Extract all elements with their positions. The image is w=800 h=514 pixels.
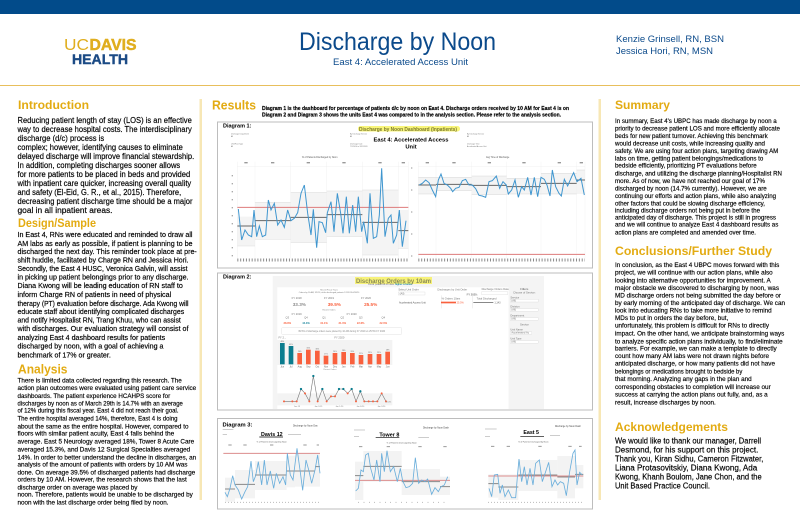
dashboard content: Q3 bbox=[359, 315, 363, 319]
dashboard filter labels: Discharge Time bbox=[467, 144, 479, 146]
bar chart: discharge orders by month: 30% bbox=[315, 349, 320, 351]
unit panel: (All) bbox=[400, 291, 405, 295]
left column divider bbox=[200, 99, 202, 500]
kpi: quarterly percentages: 31.1% bbox=[320, 321, 328, 325]
filters sidebar: (All) bbox=[511, 308, 516, 312]
text: conclusions: In conclusion, as the East 4 UBPC moves forward with this bbox=[615, 262, 780, 269]
text: acknowledgements: Desmond, for his support on this project. bbox=[615, 445, 758, 454]
text: analysis: orders by 10 AM. However, the research shows that the last bbox=[18, 477, 187, 484]
text: introduction: goal in all inpatient areas. bbox=[18, 206, 112, 215]
text: analysis: discharges by noon as of March 29th is 14.7% with an average bbox=[18, 400, 183, 407]
filters sidebar: Division bbox=[510, 305, 520, 309]
subtitle: Fiscal year 2019-20 data: higher is better bbox=[368, 283, 412, 286]
text: summary: action plans are completed and amended over time. bbox=[615, 229, 756, 236]
dashboard filter labels: 7/1/2014 to 3/31/2020 bbox=[350, 145, 368, 148]
dashboard filter labels: All bbox=[350, 135, 353, 138]
text: acknowledgements: Liana Protasovitskiy, Diana Kwong, Ada bbox=[615, 464, 758, 473]
chart: average time of discharge: Avg Time of Discharge bbox=[486, 156, 510, 159]
logo: UC Davis Health: DAVIS bbox=[90, 37, 137, 54]
text: design/sample: with discharges. Our evaluation strategy will consist of bbox=[16, 326, 189, 333]
dashboard content: Q1 bbox=[322, 315, 326, 319]
dashboard content: Orders by 10 AM, 3/1/20, while discharged patients 1/1/2019-6/30/20 bbox=[299, 291, 360, 294]
text: conclusions: that morning. Analyzing any gaps in the plan and bbox=[615, 376, 752, 383]
bar chart: discharge orders by month: Apr bbox=[368, 366, 372, 369]
kpi: quarterly percentages: 22.0% bbox=[380, 321, 388, 325]
text: summary: discharge, and utilizing the discharge planning/Hospitalist RN bbox=[615, 170, 782, 177]
dashboard filter labels: All bbox=[231, 135, 234, 138]
kpi: quarterly percentages bbox=[284, 321, 388, 325]
chart: Davis 12: Discharge by Noon Das bbox=[293, 424, 318, 427]
text: analysis: of 12% during this fiscal year. East 4 did not reach their goal. bbox=[18, 408, 179, 415]
text: introduction: decreasing patient discharge time should be a major bbox=[18, 197, 193, 206]
bar chart: discharge orders by month: 45% bbox=[289, 344, 293, 346]
label: diagram 1: Diagram 1: bbox=[223, 124, 252, 130]
label: diagram 3: Diagram 3: bbox=[222, 422, 253, 428]
text: summary: anticipated day of discharge. This project is still in progress bbox=[615, 215, 777, 222]
dashboard content: FY 2019 bbox=[292, 312, 302, 316]
line chart: recent orders: Jun 1-20 bbox=[335, 406, 344, 408]
callout bbox=[282, 328, 402, 334]
text: design/sample: in picking up patient belongings prior to any discharge. bbox=[18, 274, 189, 282]
unit panel: Discharges by Unit Order bbox=[437, 288, 467, 292]
panel: diagram 1 bbox=[218, 122, 592, 268]
dashboard content bbox=[277, 283, 538, 369]
text: analysis: 14%. In order to better understand the decline in discharges, an bbox=[18, 454, 197, 461]
filters sidebar: Service bbox=[520, 322, 529, 326]
text: design/sample: discharged by noon, with a goal of achieving a bbox=[18, 344, 164, 350]
text: introduction: with inpatient care quicker, increasing overall quality bbox=[17, 179, 191, 188]
text: design/sample bbox=[16, 232, 197, 360]
text: analysis: discharge order on average was placed by bbox=[18, 484, 138, 491]
text: introduction: way to decrease hospital costs. The interdisciplinary bbox=[17, 125, 192, 134]
filters sidebar: Department bbox=[510, 314, 524, 318]
text: analysis: The entire hospital averaged 14%, therefore, East 4 is doing bbox=[18, 415, 178, 422]
chart: Davis 12 bbox=[223, 424, 320, 502]
unit panel: Discharge Orders Date bbox=[482, 287, 509, 291]
authors: Jessica Hori, RN, MSN bbox=[616, 46, 713, 57]
unit panel: Accelerated Access Unit bbox=[399, 301, 426, 304]
dashboard content: Q3 bbox=[286, 315, 290, 319]
dashboard filter labels: Discharge Department bbox=[231, 132, 249, 136]
authors: Kenzie Grinsell, RN, BSN bbox=[616, 34, 724, 45]
unit panel: 25.5% bbox=[457, 302, 464, 305]
dashboard unit heading: East 4: Accelerated Access bbox=[374, 138, 448, 144]
text: introduction bbox=[17, 116, 194, 215]
title: Discharge by Noon bbox=[299, 28, 496, 56]
bar chart: discharge orders by month: Jun bbox=[386, 367, 390, 369]
chart: East 5: East 5 bbox=[523, 430, 539, 436]
unit panel bbox=[398, 287, 509, 308]
text: analysis: averaged 15.3%, and Davis 12 Surgical Specialties averaged bbox=[18, 446, 191, 453]
text: design/sample: AM labs as early as possible, if patient is planning to be bbox=[18, 241, 193, 248]
text: summary bbox=[614, 118, 782, 236]
bar chart: discharge orders by month: May bbox=[377, 367, 382, 369]
dashboard unit heading: Unit bbox=[405, 144, 417, 150]
kpi: yearly percentages: 39.5% bbox=[328, 302, 342, 307]
heading: acknowledgements: Acknowledgements bbox=[615, 420, 728, 434]
dashboard filter labels: Unit/Floor Type bbox=[231, 142, 243, 146]
bar chart: discharge orders by month: Jul bbox=[290, 367, 293, 369]
text: results intro: Diagram 1 is the dashboard for percentage of patients d/c by noon on East 4. Discharge orders received by 10 AM for East 4 is on bbox=[262, 106, 570, 112]
dashboard content: Q4 bbox=[382, 315, 386, 319]
filters sidebar: (All) bbox=[511, 298, 516, 302]
dashboard filter labels bbox=[231, 132, 487, 148]
bar chart: discharge orders by month: 21% bbox=[359, 353, 363, 355]
dashboard content: Recent Orders bbox=[323, 309, 335, 312]
text: design/sample: therapy (PT) evaluation before discharge. Ada Kwong will bbox=[18, 301, 189, 308]
text: introduction: In addition, completing discharges sooner allows bbox=[18, 161, 180, 170]
dashboard filter labels: By Discharge Service bbox=[467, 134, 484, 136]
text: summary: beds for new patient turnover. Achieving this benchmark bbox=[615, 133, 768, 140]
text: design/sample: benchmark of 17% or greater. bbox=[18, 352, 111, 360]
heading: analysis: Analysis bbox=[18, 362, 68, 376]
kpi: yearly percentages bbox=[292, 296, 378, 307]
bar chart: discharge orders by month: 31% bbox=[306, 348, 311, 350]
text: conclusions: result, increase discharges by noon. bbox=[615, 399, 716, 406]
text: summary: would decrease unit costs, while increasing quality and bbox=[614, 140, 765, 147]
bar chart: discharge orders by month: 26% bbox=[350, 351, 355, 353]
dashboard content: Recent Fiscal Years bbox=[320, 289, 338, 292]
chart: percent of patients discharged by noon bbox=[232, 156, 408, 260]
text: analysis: dashboards. The patient experience HCAHPS score for bbox=[18, 393, 171, 400]
text: summary: continuing our efforts and action plans, while also analyzing bbox=[615, 193, 776, 200]
dashboard content: Q2 bbox=[341, 315, 345, 319]
kpi: quarterly percentages: 22.6% bbox=[357, 321, 365, 325]
header gold rule bbox=[0, 85, 800, 86]
text: design/sample: Secondly, the East 4 HUSC, Veronica Galvin, will assist bbox=[18, 266, 188, 273]
text: introduction: discharge (d/c) process is bbox=[18, 134, 104, 143]
dashboard filter labels: Accelerated Access Unit bbox=[467, 145, 487, 148]
filters sidebar: Accelerated Ac bbox=[511, 331, 530, 335]
filters sidebar: Choose of Service: bbox=[513, 291, 536, 295]
text: acknowledgements: Thank you, Kiran Sidhu, Cameron Fitzwater, bbox=[615, 455, 763, 464]
text: conclusions: MD discharge orders not being submitted the day before or bbox=[615, 292, 782, 299]
panel: results bbox=[212, 98, 592, 509]
text: analysis: There is limited data collected regarding this research. The bbox=[18, 377, 182, 384]
kpi: yearly percentages: FY 2018 bbox=[292, 296, 302, 300]
right column divider bbox=[598, 99, 601, 500]
kpi: yearly percentages: FY 2019 bbox=[324, 296, 335, 300]
text: introduction: delayed discharge will improve financial stewardship. bbox=[18, 152, 194, 161]
dashboard title: Discharge Orders by 10am bbox=[356, 279, 431, 285]
kpi: yearly percentages: FY 2020 bbox=[361, 296, 372, 300]
bar chart: discharge orders by month: 26% bbox=[333, 351, 337, 353]
text: conclusions: unfortunately, this problem is difficult for RNs to directly bbox=[615, 323, 770, 330]
kpi: yearly percentages: 25.5% bbox=[364, 302, 378, 307]
panel: right column bbox=[614, 98, 785, 491]
text: analysis: noon. Therefore, patients would be unable to be discharged by bbox=[18, 492, 193, 499]
kpi: quarterly percentages: 44.3% bbox=[302, 321, 310, 325]
filters sidebar: (All) bbox=[511, 340, 516, 344]
panel: diagram 2 bbox=[218, 273, 592, 410]
bar chart: discharge orders by month: FY 2020 bbox=[334, 336, 345, 340]
bar chart: discharge orders by month: 28% bbox=[386, 350, 390, 352]
text: analysis: done. On average 39.5% of discharged patients had discharge bbox=[18, 469, 196, 476]
text: conclusions: barriers. For example, we can make a template to directly bbox=[615, 346, 777, 353]
text: conclusions: looking into alternative opportunities for improvement. A bbox=[615, 277, 771, 284]
dashboard title: Discharge by Noon Dashboard (Inpatients) bbox=[359, 127, 457, 133]
bar chart: discharge orders by month: 48% bbox=[280, 341, 285, 343]
filters sidebar: Service bbox=[510, 295, 520, 299]
text: summary: more. As of now, we have not reached our goal of 17% bbox=[615, 178, 765, 185]
bar chart: discharge orders by month: FY 2... bbox=[278, 336, 286, 340]
line chart: recent orders: Jun 3-20 bbox=[377, 406, 386, 408]
line chart: recent orders: Jun 8-20 bbox=[356, 406, 365, 408]
bar chart: discharge orders by month: Mar bbox=[359, 366, 363, 369]
text: analysis: about the same as the entire hospital. However, compared to bbox=[18, 423, 189, 430]
chart: East 5: Discharge by Noon Dash bbox=[555, 425, 582, 428]
text: design/sample: inform Charge RN of patients in need of physical bbox=[18, 292, 172, 299]
text: summary: labs on time, getting patient belongings/medications to bbox=[615, 155, 764, 162]
text: results intro bbox=[262, 106, 570, 118]
text: conclusions bbox=[615, 262, 785, 406]
kpi: quarterly percentages: 38.8% bbox=[284, 321, 292, 325]
bar chart: discharge orders by month: Jun bbox=[280, 367, 285, 369]
line chart: recent orders: Recent Orders bbox=[324, 368, 336, 371]
panel: diagram 3 bbox=[218, 418, 592, 509]
text: summary: In summary, East 4's UBPC has made discharge by noon a bbox=[615, 118, 777, 125]
chart: East 5: % of Patients Discharged by Noon bbox=[518, 441, 548, 444]
text: summary: safety. We are using four action plans, targeting drawing AM bbox=[615, 148, 778, 155]
dashboard filter labels: All bbox=[467, 135, 470, 138]
bar chart: discharge orders by month: Oct bbox=[316, 366, 319, 369]
chart: Tower 8 bbox=[354, 426, 450, 502]
heading: conclusions: Conclusions/Further Study bbox=[615, 244, 772, 258]
text: conclusions: belongings or medications brought to bedside by bbox=[615, 368, 743, 375]
heading: results: Results bbox=[212, 98, 256, 112]
logo: UC Davis Health: HEALTH bbox=[72, 51, 128, 67]
text: conclusions: project, we will continue with our action plans, while also bbox=[615, 269, 773, 276]
text: design/sample: analyzing East 4 dashboard results for patients bbox=[18, 335, 166, 342]
bar chart: discharge orders by month bbox=[277, 336, 392, 369]
filters sidebar: Unit Name bbox=[510, 328, 523, 332]
chart: Davis 12: % of Patients Discharged by Noon bbox=[257, 441, 287, 444]
heading: design/sample: Design/Sample bbox=[18, 216, 96, 230]
bar chart: discharge orders by month: Jan bbox=[342, 367, 346, 369]
text: conclusions: success at carrying the action plans out fully, and, as a bbox=[615, 392, 768, 399]
text: analysis: action plan outcomes were evaluated using patient care service bbox=[18, 385, 197, 392]
chart: Tower 8: Tower 8 bbox=[379, 433, 399, 439]
bar chart: discharge orders by month: 23% bbox=[377, 352, 381, 354]
unit panel: Total Discharged bbox=[477, 296, 497, 300]
line chart: recent orders: Jun 19 bbox=[294, 406, 301, 408]
bar chart: discharge orders by month: Sep bbox=[306, 367, 311, 369]
dashboard content: Q4 bbox=[304, 315, 308, 319]
text: acknowledgements: Kwong, Khanh Boulom, Jane Chon, and the bbox=[615, 473, 762, 482]
filters sidebar: (All) bbox=[511, 317, 516, 321]
chart: average time of discharge bbox=[412, 156, 585, 260]
text: analysis bbox=[18, 377, 197, 506]
filters sidebar: Filters bbox=[520, 287, 529, 291]
text: conclusions: look into educating RNs to take more initiative to remind bbox=[615, 307, 772, 314]
line chart: recent orders: 22.0% bbox=[386, 402, 391, 404]
text: introduction: for more patients to be placed in beds and provided bbox=[18, 170, 190, 179]
text: design/sample: discharged the next day. This reminder took place at pre- bbox=[18, 249, 197, 256]
chart: Tower 8: % of Patients Discharged by Noon bbox=[387, 442, 417, 445]
chart: Davis 12: Davis 12 bbox=[261, 432, 283, 438]
filters sidebar: Unit Type bbox=[510, 337, 522, 341]
text: design/sample: Diana Kwong will be leading education of RN staff to bbox=[18, 283, 183, 290]
dashboard filter labels: By Discharge Service bbox=[350, 134, 367, 136]
subtitle: East 4: Accelerated Access Unit bbox=[333, 57, 468, 68]
bar chart: discharge orders by month: 23% bbox=[368, 352, 372, 354]
text: acknowledgements: We would like to thank our manager, Darrell bbox=[615, 436, 761, 445]
bar chart: discharge orders by month: 17% bbox=[324, 354, 328, 356]
kpi: yearly percentages: 33.3% bbox=[293, 302, 307, 307]
dashboard filter labels: Discharge Date bbox=[350, 142, 362, 146]
bar chart: discharge orders by month: 26% bbox=[298, 351, 302, 353]
text: conclusions: impact. On the other hand, we anticipate brainstorming ways bbox=[615, 331, 785, 338]
dashboard unit heading bbox=[374, 138, 448, 150]
callout: 39.5% of discharge orders were placed by 10 AM during FY 2019 vs 25.5% FY 2020 bbox=[298, 330, 386, 333]
dashboard filter labels: All bbox=[231, 145, 234, 148]
text: conclusions: to analyze specific action plans individually, to find/eliminate bbox=[615, 338, 783, 345]
text: design/sample: educate staff about identifying complicated discharges bbox=[18, 309, 185, 316]
unit panel: % Orders 10am bbox=[442, 296, 461, 300]
line chart: recent orders: Jun 3-19 bbox=[314, 406, 323, 408]
text: conclusions: anticipated discharge, or how many patients did not have bbox=[615, 361, 775, 368]
text: design/sample: In East 4, RNs were educated and reminded to draw all bbox=[18, 232, 193, 239]
dashboard content: FY 2020 bbox=[347, 312, 357, 316]
heading: summary: Summary bbox=[615, 98, 670, 112]
bar chart: discharge orders by month: Feb bbox=[350, 367, 355, 369]
logo: UC Davis Health bbox=[64, 37, 137, 67]
text: summary: other factors that could be slowing discharge efficiency, bbox=[615, 200, 765, 207]
text: conclusions: count how many AM labs were not drawn nights before bbox=[615, 353, 769, 360]
text: introduction: complex; however, identifying causes to eliminate bbox=[18, 143, 183, 152]
text: summary: bedside efficiently, prioritizing PT evaluations before bbox=[615, 162, 757, 169]
kpi: quarterly percentages: 31.0% bbox=[339, 321, 347, 325]
text: analysis: floors with similar patient acuity, East 4 falls behind the bbox=[18, 431, 175, 438]
text: summary: including discharge orders not being put in before the bbox=[615, 207, 760, 214]
text: results intro: Diagram 2 and Diagram 3 shows the units East 4 was compared to in the analysis section. Please refer to the analysis section. bbox=[262, 112, 561, 118]
text: acknowledgements bbox=[615, 436, 763, 491]
authors bbox=[616, 34, 724, 57]
logo: UC Davis Health: UC bbox=[64, 37, 89, 54]
header band bbox=[0, 0, 800, 14]
text: summary: priority to decrease patient LOS and more efficiently allocate bbox=[615, 125, 780, 132]
text: conclusions: by early morning of the anticipated day of discharge. We can bbox=[615, 300, 785, 307]
text: analysis: average. East 5 Neurology averaged 18%, Tower 8 Acute Care bbox=[18, 439, 195, 446]
unit panel: Select Unit Order bbox=[398, 288, 419, 292]
bar chart: discharge orders by month: Aug bbox=[298, 366, 302, 369]
chart: East 5 bbox=[485, 425, 583, 502]
unit panel: FY 2020: bbox=[467, 292, 478, 296]
text: summary: and we will continue to analyze East 4 dashboard results as bbox=[615, 222, 779, 229]
text: introduction: and safety (El-Eid, G. R., et al., 2015). Therefore, bbox=[18, 188, 181, 197]
text: acknowledgements: Unit Based Practice Council. bbox=[615, 482, 710, 491]
line chart: recent orders bbox=[277, 368, 392, 408]
label: diagram 2: Diagram 2: bbox=[223, 274, 252, 280]
text: conclusions: corresponding obstacles to completion will increase our bbox=[615, 384, 771, 391]
filters sidebar bbox=[510, 287, 538, 344]
text: summary: discharged by noon (14.7% currently). However, we are bbox=[615, 186, 767, 193]
chart: percent of patients discharged by noon: % of Patients Discharged by Noon bbox=[302, 156, 338, 159]
text: analysis: analysis of the amount of patients with orders by 10 AM was bbox=[18, 462, 188, 469]
bar chart: discharge orders by month: Dec bbox=[333, 367, 338, 369]
text: introduction: Reducing patient length of stay (LOS) is an effective bbox=[18, 116, 192, 125]
heading: introduction: Introduction bbox=[18, 98, 89, 112]
bar chart: discharge orders by month: 28% bbox=[342, 350, 346, 352]
chart: Tower 8: Discharge by Noon Dash bbox=[423, 426, 450, 429]
panel: left column bbox=[16, 98, 197, 506]
text: conclusions: major obstacle we discovered to discharging by noon, was bbox=[615, 285, 780, 292]
text: design/sample: and notify Hospitalist RN, Trang Khuu, who can assist bbox=[18, 318, 181, 324]
unit panel: 1,143 bbox=[494, 302, 501, 305]
text: design/sample: shift huddle, facilitated by Charge RN and Jessica Hori. bbox=[18, 258, 189, 264]
dashboard background bbox=[273, 276, 544, 409]
text: conclusions: MDs to put in orders the day before, but, bbox=[615, 315, 728, 322]
bar chart: discharge orders by month: Nov bbox=[324, 367, 329, 369]
text: analysis: noon with the last discharge order being filed by noon. bbox=[18, 499, 169, 506]
